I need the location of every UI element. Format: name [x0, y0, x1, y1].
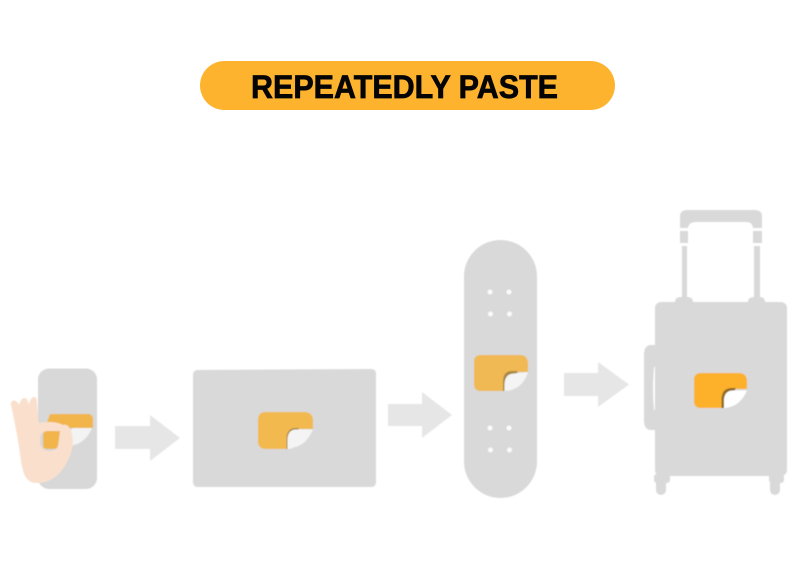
step 4: suitcase — [644, 210, 787, 495]
truck holes — [488, 290, 512, 452]
side handle — [644, 345, 656, 430]
step 2: card — [193, 369, 376, 487]
title pill: REPEATEDLY PASTE — [251, 69, 558, 105]
title pill — [200, 61, 615, 110]
step 1: phone with hand — [12, 368, 97, 489]
hand — [12, 398, 72, 482]
skateboard sticker — [474, 355, 528, 391]
sticker in fingers — [43, 431, 60, 449]
arrow 3 — [564, 362, 629, 407]
suitcase sticker — [694, 373, 747, 408]
phone — [38, 368, 97, 489]
wheels — [654, 474, 784, 495]
phone sticker — [45, 414, 93, 449]
arrow 2 — [388, 392, 452, 438]
arrow 1 — [115, 415, 180, 461]
telescopic handle — [675, 210, 765, 302]
case body — [655, 302, 787, 476]
step 3: skateboard — [464, 240, 537, 498]
card sticker — [258, 412, 313, 449]
ring gap — [40, 431, 60, 451]
deck — [464, 240, 537, 498]
card — [193, 369, 376, 487]
